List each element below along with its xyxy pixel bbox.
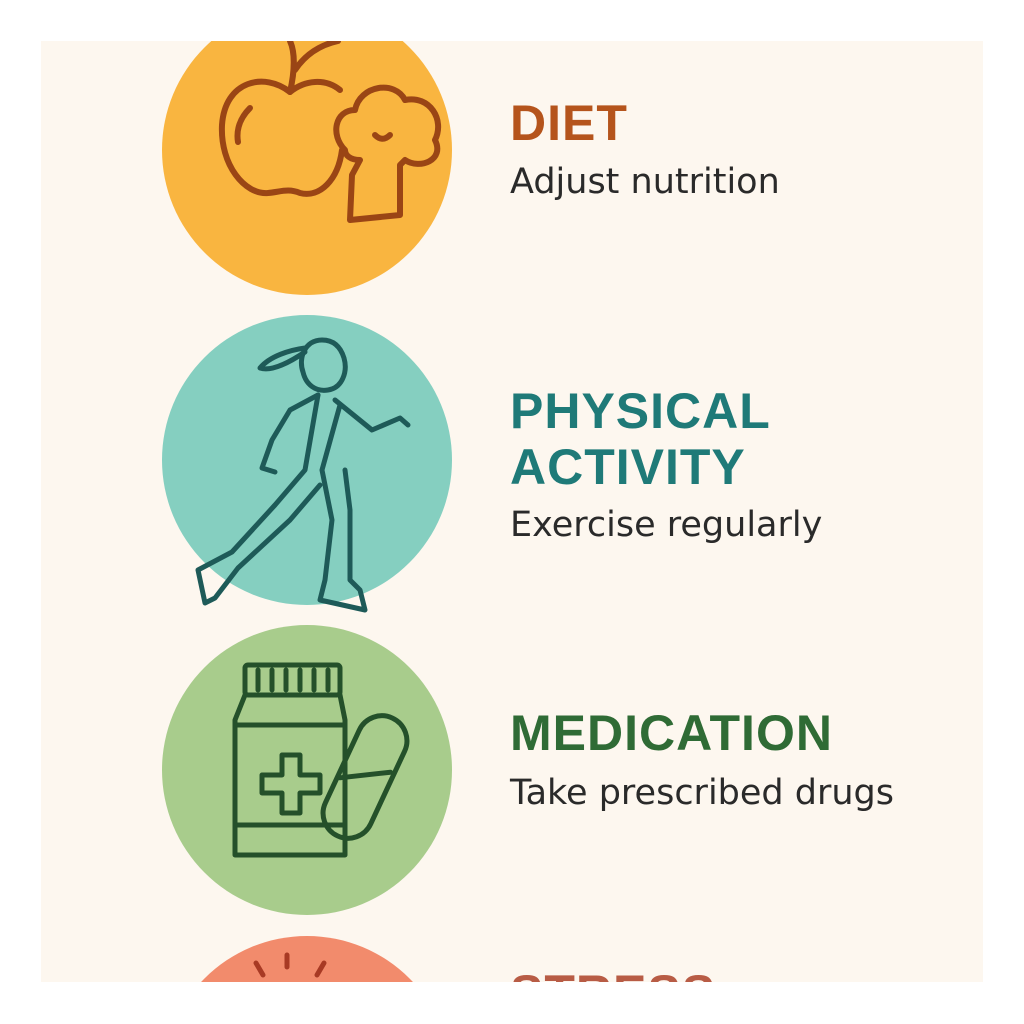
text: medication: Take prescribed drugs <box>510 773 894 813</box>
circle: diet <box>162 5 452 295</box>
heading: diet: DIET <box>510 95 628 151</box>
text: diet: Adjust nutrition <box>510 162 780 202</box>
icon: runner <box>198 340 408 610</box>
icon: pill bottle <box>235 665 415 855</box>
text: physical activity: Exercise regularly <box>510 505 822 545</box>
heading: physical activity: PHYSICAL <box>510 383 771 439</box>
circle: medication <box>162 625 452 915</box>
heading: medication: MEDICATION <box>510 705 833 761</box>
circle: physical activity <box>162 315 452 605</box>
icon: stress rays <box>256 955 324 975</box>
circle: stress <box>162 936 452 1024</box>
heading: physical activity <box>510 383 771 495</box>
icon: apple and broccoli <box>222 41 438 220</box>
heading: physical activity: ACTIVITY <box>510 439 746 495</box>
